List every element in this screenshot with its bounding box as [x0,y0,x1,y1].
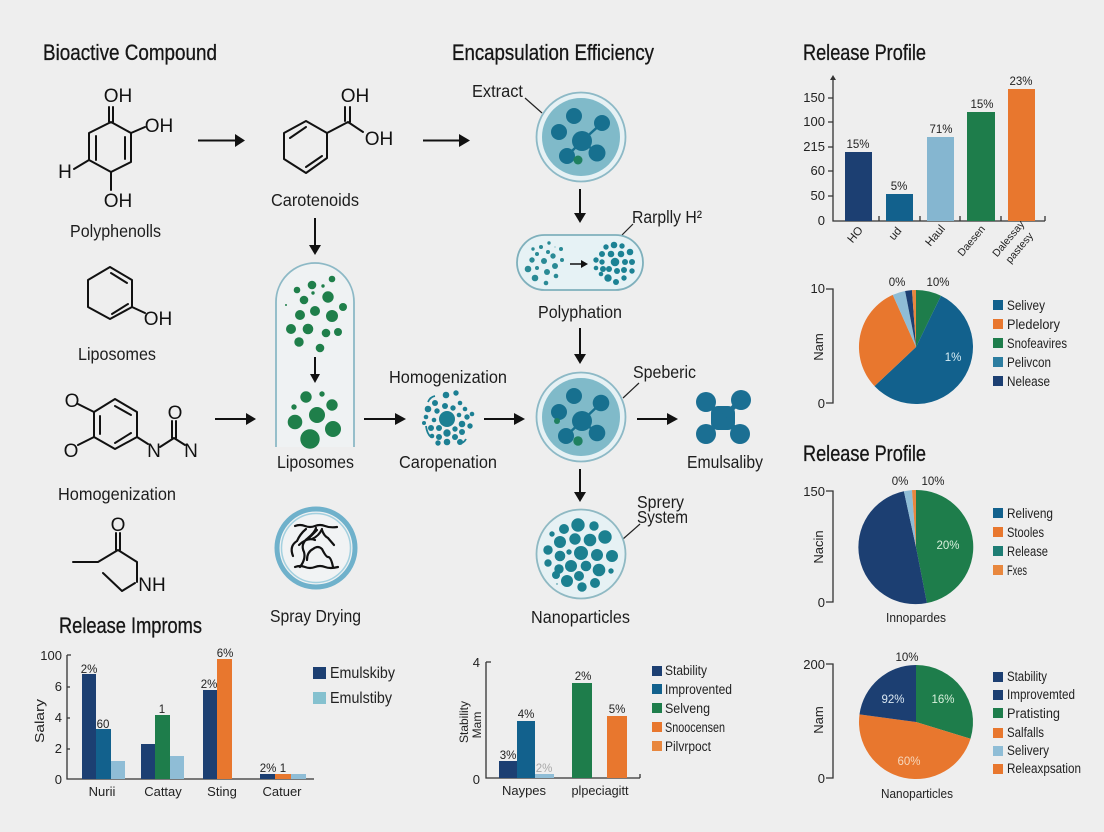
molecule: polyphenol: OH [104,86,132,107]
bar chart: stability: 2% [536,763,552,775]
pie chart: top: Nam [811,333,826,361]
bar chart: release profile top: 60 [811,163,825,178]
legend: bottom pie: Pratisting [1007,706,1060,721]
bar chart: release profile top: 71% [929,124,953,136]
green droplets upper [285,276,347,352]
label: Polyphenolls: Polyphenolls [70,221,161,241]
title: Release Profile second: Release Profile [803,441,926,466]
bar chart: release improms: 6 [55,679,62,694]
bar chart: stability: Stability [457,701,471,743]
bar chart: release profile top: 15% [970,99,994,111]
molecule: urea derivative: O [64,441,78,462]
bar chart: stability: plpeciagitt [572,783,629,798]
legend: top pie: Snofeavires [1007,336,1067,351]
molecule: urea derivative: N [147,441,161,462]
label: Rarplly H: Rarplly H² [632,207,702,227]
label: Liposomes left: Liposomes [78,344,156,364]
molecule: carotenoid [284,86,393,173]
bar chart: release improms: 2 [55,741,62,756]
label: Caropenation: Caropenation [399,452,497,472]
pie chart: middle: Nacin [811,530,826,564]
bar chart: stability: Mam [470,712,484,738]
bar chart: release improms: Nurii [89,784,115,799]
arrow: carotenoid to extract [423,134,470,147]
legend: bottom pie: Improvemted [1007,687,1075,702]
arrow: cluster to cell [484,413,525,425]
legend: stability [652,663,732,754]
bar chart: release improms: 2% [201,679,217,691]
bar chart: release profile top: 100 [803,114,825,129]
pie chart: bottom: 92% [881,694,905,706]
label: Spray Drying: Spray Drying [270,606,361,626]
molecule: urea derivative: N [184,441,198,462]
arrow: polyphenol to carotenoid [198,134,245,147]
caption: Nanoparticles pie: Nanoparticles [881,786,953,801]
pie chart: bottom: 16% [931,694,955,706]
molecule: phenol [88,267,172,330]
label: Sprery System [637,492,688,527]
arrow: cell to nanoparticles [574,469,586,502]
bar chart: release profile top: 50 [811,188,825,203]
bar chart: release improms: Cattay [144,784,182,799]
label: Nanoparticles: Nanoparticles [531,607,630,627]
label: Extract: Extract [472,81,523,101]
molecule: amine: O [111,515,125,536]
pie chart: top: 0 [818,396,825,411]
leader: extract [525,98,542,113]
pie chart: middle: 10% [921,476,945,488]
arrow: liposomes to cluster [364,413,406,425]
pie chart: top: 10 [811,281,825,296]
legend: stability: Selveng [665,701,710,716]
pie chart: bottom: 60% [897,756,921,768]
bar chart: release profile top: 15% [846,139,870,151]
molecule: amine [73,515,166,596]
legend: middle pie [993,506,1053,578]
legend: middle pie: Reliveng [1007,506,1053,521]
capsule cell: spherical [536,372,626,462]
pie chart: middle [803,476,973,610]
pie chart: bottom [803,652,973,786]
bar chart: release profile top: Haul [924,223,948,249]
pie chart: bottom: 0 [818,771,825,786]
label: Homogenization centre: Homogenization [389,367,507,387]
pie chart: top: 10% [926,277,950,289]
arrow: polyphation down [574,328,586,364]
icon: nanoparticles [536,510,626,598]
bar chart: release improms: 2% [81,664,97,676]
bar chart: release profile top: Dalessay [990,218,1028,259]
molecule: carotenoid: OH [365,129,393,150]
legend: middle pie: Release [1007,544,1048,559]
leader: rarplly [622,224,633,235]
legend: bottom pie [993,669,1081,776]
bar chart: release improms: 1 [159,704,165,716]
molecule: phenol: OH [144,309,172,330]
label: Emulsaliby: Emulsaliby [687,452,763,472]
legend: stability: Stability [665,663,707,678]
legend: bottom pie: Stability [1007,669,1047,684]
bar chart: stability [457,655,640,798]
bar chart: stability: Naypes [502,783,547,798]
bar chart: release improms: 2% [260,763,276,775]
molecule: urea derivative: O [168,403,182,424]
pie chart: bottom: 10% [895,652,919,664]
arrow: carotenoid down [309,218,321,255]
arrow: urea to liposomes [215,413,256,425]
arrow inside capsule [310,357,320,383]
capsule cell: extract [536,92,626,182]
molecule: urea derivative: O [65,391,79,412]
label: Sprery System: System [637,507,688,527]
pie chart: bottom: 200 [803,657,825,672]
bar chart: stability: 0 [473,772,480,787]
molecule: polyphenol: OH [145,116,173,137]
bar chart: stability: 3% [500,750,516,762]
bar chart: stability: 5% [609,704,625,716]
bar chart: release improms: 100 [40,648,62,663]
legend: bottom pie: Salfalls [1007,725,1044,740]
bar chart: release profile top: Daesen [955,223,988,259]
leader: sprery [623,524,640,539]
bar chart: release improms: 6% [217,648,233,660]
arrow: extract down [574,189,586,223]
legend: stability: Improvented [665,682,732,697]
bar chart: release profile top [803,75,1045,266]
title: Bioactive Compound: Bioactive Compound [43,40,217,65]
bar chart: release improms: 4 [55,710,62,725]
bar chart: stability: 4 [473,655,480,670]
pie chart: top: 1% [945,352,961,364]
dots sparse [525,241,564,285]
pie chart: middle: 0 [818,595,825,610]
pie chart: middle: 0% [892,476,908,488]
bar chart: release profile top: 0 [818,213,825,228]
molecule: urea derivative [64,391,198,462]
bar chart: stability: 4% [518,709,534,721]
bar chart: release profile top: 23% [1009,76,1033,88]
icon: emulsion molecule [696,390,751,444]
legend: middle pie: Fxes [1007,563,1027,578]
legend: top pie: Pledelory [1007,317,1060,332]
leader: speberic [623,383,639,398]
molecule: polyphenol: OH [104,191,132,212]
bar chart: release improms [32,648,314,799]
legend: top pie [993,298,1067,389]
dots dense [593,242,635,285]
molecule: polyphenol [58,86,173,212]
pie chart: middle: 20% [936,540,960,552]
molecule: amine: NH [138,575,166,596]
molecule: polyphenol: H [58,162,72,183]
arrow inside capsule [570,260,588,268]
legend: bottom pie: Releaxpsation [1007,761,1081,776]
bar chart: release improms: Catuer [262,784,302,799]
legend: release improms [313,665,395,707]
bar chart: stability: 2% [575,671,591,683]
bar chart: release improms: Salary [32,698,47,743]
bar chart: release profile top: 215 [803,139,825,154]
bar chart: release profile top: 5% [891,181,907,193]
bar chart: release improms: 60 [97,719,109,731]
icon: particle cluster [422,390,474,446]
molecule: carotenoid: OH [341,86,369,107]
capsule: polyphation [517,235,643,290]
label: Carotenoids: Carotenoids [271,190,359,210]
legend: stability: Snoocensen [665,720,725,735]
legend: release improms: Emulskiby [330,665,395,682]
green droplets lower [288,391,341,449]
label: Sprery System: Sprery [637,492,684,512]
bar chart: release profile top: 150 [803,90,825,105]
legend: top pie: Pelivcon [1007,355,1051,370]
arrow: cell to emulsion [637,413,678,425]
pie chart: top [811,277,973,411]
legend: bottom pie: Selivery [1007,743,1049,758]
bar chart: release improms: 0 [55,772,62,787]
pie chart: middle: 150 [803,484,825,499]
bar chart: release profile top: pastesy [1003,230,1036,266]
legend: middle pie: Stooles [1007,525,1044,540]
pie chart: top: 0% [889,277,905,289]
title: Release Profile: Release Profile [803,40,926,65]
label: Speberic: Speberic [633,362,696,382]
label: Homogenization left: Homogenization [58,484,176,504]
title: Encapsulation Efficiency: Encapsulation Efficiency [452,40,654,65]
title: Release Improms: Release Improms [59,613,202,638]
bar chart: release improms: 1 [280,763,286,775]
bar chart: release profile top: ud [887,225,904,243]
legend: stability: Pilvrpoct [665,739,711,754]
caption: Innopardes: Innopardes [886,610,946,625]
icon: spray drying ring [277,509,355,587]
legend: top pie: Nelease [1007,374,1050,389]
legend: top pie: Selivey [1007,298,1045,313]
pie chart: bottom: Nam [811,706,826,734]
legend: release improms: Emulstiby [330,690,392,707]
capsule: liposome vessel [276,263,354,449]
bar chart: release profile top: HO [846,225,866,246]
bar chart: release improms: Sting [207,784,237,799]
label: Polyphation: Polyphation [538,302,622,322]
label: Liposomes centre: Liposomes [277,452,354,472]
